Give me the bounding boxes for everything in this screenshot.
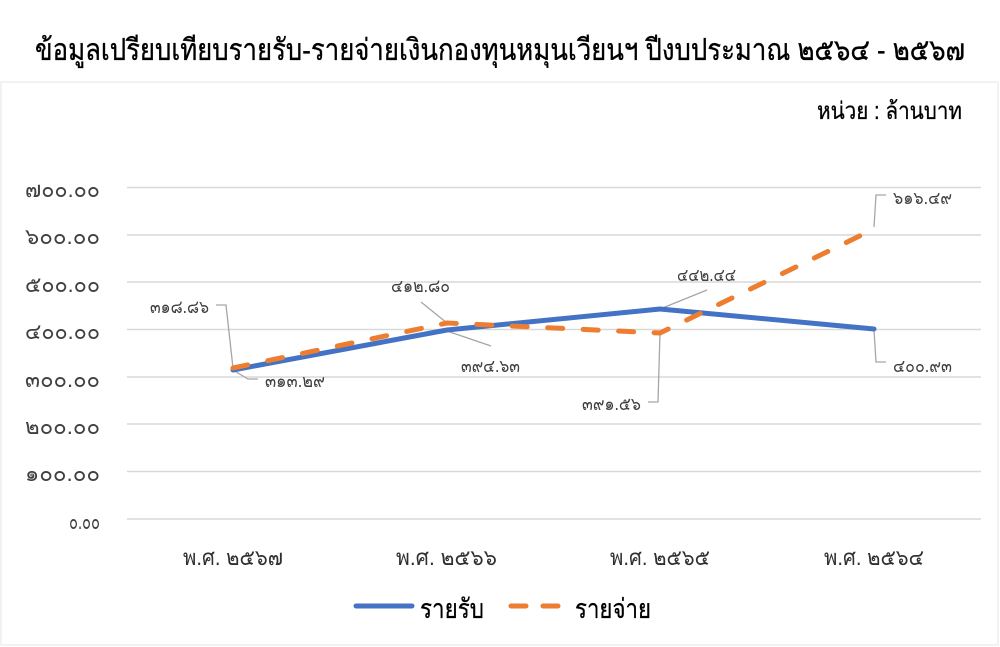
category labels: พ.ศ. ๒๕๖๔ xyxy=(824,545,924,570)
legend: income: รายรับ xyxy=(420,594,484,624)
legend: expense xyxy=(511,594,651,624)
gridlines xyxy=(127,188,981,519)
legend: expense: รายจ่าย xyxy=(575,594,651,624)
data labels: ๓๙๔.๖๓ xyxy=(461,356,520,376)
data labels: ๓๙๑.๕๖ xyxy=(582,394,641,414)
y axis labels: ๐.๐๐ xyxy=(69,509,100,534)
data labels: ๔๑๒.๘๐ xyxy=(391,276,450,296)
unit label: หน่วย : ล้านบาท xyxy=(817,98,962,125)
y axis labels xyxy=(25,177,100,534)
legend: income xyxy=(356,594,484,624)
y axis labels: ๒๐๐.๐๐ xyxy=(25,414,100,439)
category labels xyxy=(183,545,924,570)
y axis labels: ๖๐๐.๐๐ xyxy=(25,224,100,249)
legend xyxy=(356,594,651,624)
y axis labels: ๗๐๐.๐๐ xyxy=(25,177,100,202)
data labels: ๔๐๐.๙๓ xyxy=(893,356,952,376)
category labels: พ.ศ. ๒๕๖๕ xyxy=(610,545,710,570)
line series: income xyxy=(233,309,874,370)
category labels: พ.ศ. ๒๕๖๖ xyxy=(396,545,497,570)
data labels: ๖๑๖.๔๙ xyxy=(893,188,952,208)
data labels: ๓๑๘.๘๖ xyxy=(150,297,209,317)
line series: expense xyxy=(233,229,874,368)
y axis labels: ๑๐๐.๐๐ xyxy=(25,461,100,486)
category labels: พ.ศ. ๒๕๖๗ xyxy=(183,545,283,570)
y axis labels: ๔๐๐.๐๐ xyxy=(25,319,100,344)
data labels: ๔๔๒.๔๔ xyxy=(677,265,736,285)
y axis labels: ๓๐๐.๐๐ xyxy=(25,367,100,392)
data labels xyxy=(150,188,952,414)
data labels: ๓๑๓.๒๙ xyxy=(265,371,325,391)
y axis labels: ๕๐๐.๐๐ xyxy=(25,272,100,297)
leader lines xyxy=(216,195,886,402)
